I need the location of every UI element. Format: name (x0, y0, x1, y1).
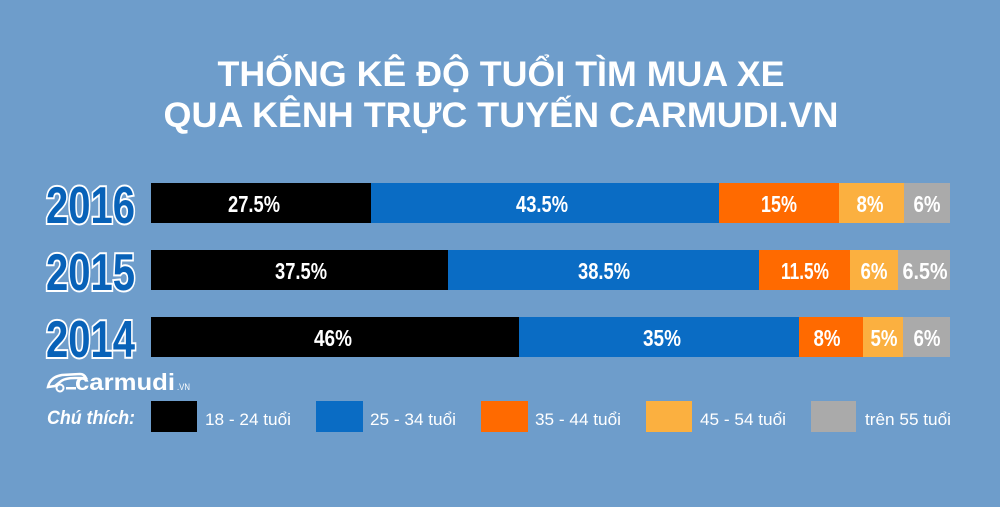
legend: trên 55 tuổi (865, 410, 951, 429)
title: QUA KÊNH TRỰC TUYẾN CARMUDI.VN (164, 95, 838, 135)
logo: carmudi.vn (48, 369, 190, 395)
bar 2014: 6% (914, 325, 940, 351)
bar 2015: 6.5% (902, 258, 948, 284)
bar 2015 (151, 250, 950, 290)
logo: carmudi.vn: .VN (177, 382, 190, 392)
year label 2014: 2014 (46, 311, 135, 369)
bar 2014 (151, 317, 950, 357)
bar 2014: 8% (814, 325, 840, 351)
title (164, 54, 838, 135)
year label 2016: 2016 (46, 177, 135, 235)
bar 2016: 8% (856, 191, 884, 217)
bar 2015: 6% (860, 258, 888, 284)
year label 2015: 2015 (46, 244, 135, 302)
bar 2016: 27.5% (228, 191, 280, 217)
bar 2016: 43.5% (516, 191, 568, 217)
bar 2016: 6% (914, 191, 940, 217)
legend: 35 - 44 tuổi (535, 410, 621, 429)
legend: 25 - 34 tuổi (370, 410, 456, 429)
bar 2014: 46% (314, 325, 352, 351)
bar 2016: 15% (761, 191, 797, 217)
bar 2014: 35% (643, 325, 681, 351)
legend (47, 401, 951, 432)
legend: 45 - 54 tuổi (700, 410, 786, 429)
bar 2014: 5% (870, 325, 898, 351)
bar 2015: 37.5% (275, 258, 327, 284)
legend: Chú thích: (47, 408, 135, 429)
bar 2015: 38.5% (578, 258, 630, 284)
title: THỐNG KÊ ĐỘ TUỔI TÌM MUA XE (218, 54, 784, 94)
bar 2015: 11.5% (781, 258, 829, 284)
logo: carmudi.vn: carmudi (75, 369, 175, 395)
legend: 18 - 24 tuổi (205, 410, 291, 429)
bar 2016 (151, 183, 950, 223)
